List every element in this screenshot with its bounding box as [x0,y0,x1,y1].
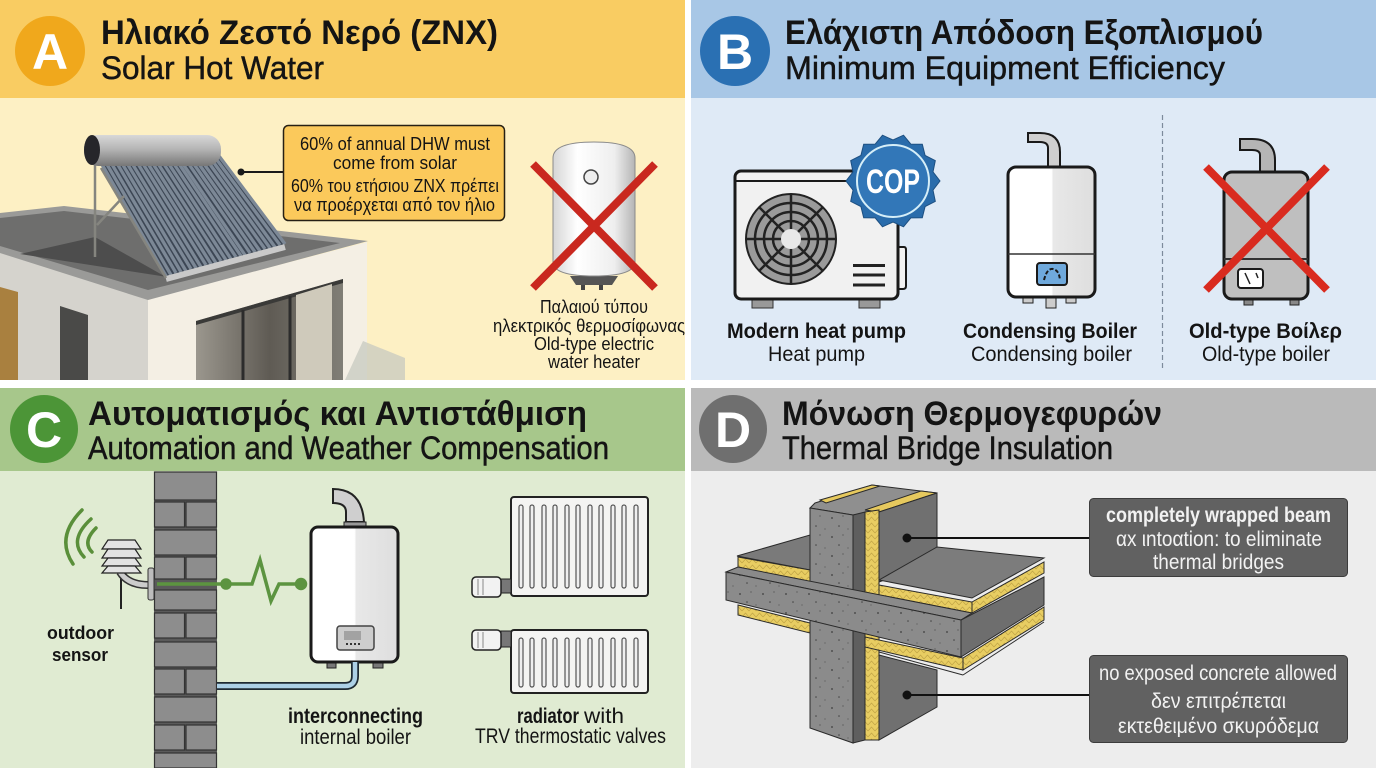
illustration: house with solar heater [0,135,405,380]
callout: 60 percent [238,126,504,220]
callout: 60 percent: να προέρχεται από τον ήλιο [294,195,495,215]
heading D [782,395,1162,466]
lower back column [879,655,937,740]
beam [726,567,972,620]
badge B [700,16,770,86]
label: old electric heater: Old-type electric [534,334,654,354]
label: outdoor sensor: sensor [52,645,108,665]
icon: upper radiator [472,497,648,597]
brick wall [154,472,217,768]
label: old electric heater [493,297,685,372]
heading A [101,14,498,86]
label: radiator: TRV thermostatic valves [475,725,666,748]
heading B: Ελάχιστη Απόδοση Εξοπλισμού [785,14,1263,52]
callout: exposed concrete: no exposed concrete allowed [1099,662,1337,685]
label: old electric heater: ηλεκτρικός θερμοσίφωνας [493,316,685,336]
interconnecting pipe [217,662,355,686]
column [810,508,853,743]
heading C: Αυτοματισμός και Αντιστάθμιση [88,395,587,433]
callout: wrapped beam [1090,498,1348,576]
label: old electric heater: water heater [547,352,640,372]
label: old boiler: Old-type Βοίλερ [1189,320,1342,343]
callout: wrapped beam: thermal bridges [1153,551,1284,574]
label: condensing boiler: Condensing Boiler [963,320,1137,343]
heading B [785,14,1263,86]
callout: 60 percent: 60% of annual DHW must [300,134,490,154]
leader: exposed concrete [902,690,1089,700]
label: radiator [475,705,666,748]
label: radiator: radiator [517,705,579,728]
icon: lower TRV valve [472,630,511,650]
heading A: Ηλιακό Ζεστό Νερό (ZNX) [101,14,498,52]
panel: B equipment efficiency [691,0,1376,380]
diagram: wrapped beam and column [726,485,1044,743]
label: boiler [288,705,423,749]
signal line [157,560,306,601]
label: heat pump: Modern heat pump [727,320,906,343]
callout: exposed concrete: δεν επιτρέπεται [1151,690,1286,713]
callout: exposed concrete [1090,656,1348,742]
icon: wall boiler [311,489,398,668]
badge D [699,395,767,463]
icon: crossed old boiler [1206,139,1327,305]
callout: 60 percent: come from solar [333,153,457,173]
panel: A solar hot water [0,0,685,380]
heading D: Thermal Bridge Insulation [782,430,1113,466]
heading C [88,395,609,466]
badge C: C [26,402,62,458]
icon: upper TRV valve [472,577,511,597]
badge A: A [32,24,68,80]
solar collector tubes [100,156,285,276]
solar storage tank [84,135,221,166]
icon: COP badge [846,135,940,227]
upper slab top [737,535,810,570]
label: boiler: interconnecting [288,705,423,728]
icon: heat pump unit [735,171,906,308]
panel: C automation [0,388,685,768]
header band C [0,388,685,471]
label: heat pump [727,320,906,366]
icon: crossed old electric heater [533,142,655,290]
label: condensing boiler [963,320,1137,366]
column top and back face [810,485,937,515]
callout: wrapped beam: αx ιntοαtion: to eliminate [1116,528,1322,551]
header band B [691,0,1376,98]
callout: wrapped beam: completely wrapped beam [1106,504,1331,527]
icon: condensing boiler [1008,133,1095,308]
badge A [15,16,85,86]
label: old boiler [1189,320,1342,366]
lower insulation [738,605,810,633]
header band A [0,0,685,98]
label: heat pump: Heat pump [768,343,865,366]
label: old boiler: Old-type boiler [1202,343,1330,366]
callout: 60 percent: 60% του ετήσιου ZNX πρέπει [291,176,499,196]
label: radiator: with [583,705,624,728]
label: boiler: internal boiler [300,726,411,749]
divider [1162,115,1164,368]
badge C [10,395,78,463]
callout: exposed concrete: εκτεθειμένο σκυρόδεμα [1118,715,1319,738]
panel: D thermal bridges [691,388,1376,768]
label: old electric heater: Παλαιού τύπου [540,297,648,317]
heading D: Μόνωση Θερμογεφυρών [782,395,1162,433]
header band D [691,388,1376,471]
upper insulation [738,557,810,583]
badge D: D [715,402,751,458]
label: outdoor sensor: outdoor [47,623,114,643]
heading C: Automation and Weather Compensation [88,430,609,466]
heading A: Solar Hot Water [101,50,324,86]
icon: outdoor sensor [66,510,154,609]
label: outdoor sensor [47,623,114,665]
badge B: B [717,24,753,80]
label: condensing boiler: Condensing boiler [971,343,1132,366]
leader: wrapped beam [902,534,1089,542]
heading B: Minimum Equipment Efficiency [785,50,1225,86]
icon: lower radiator [472,630,648,693]
icon: COP badge: COP [866,163,920,201]
